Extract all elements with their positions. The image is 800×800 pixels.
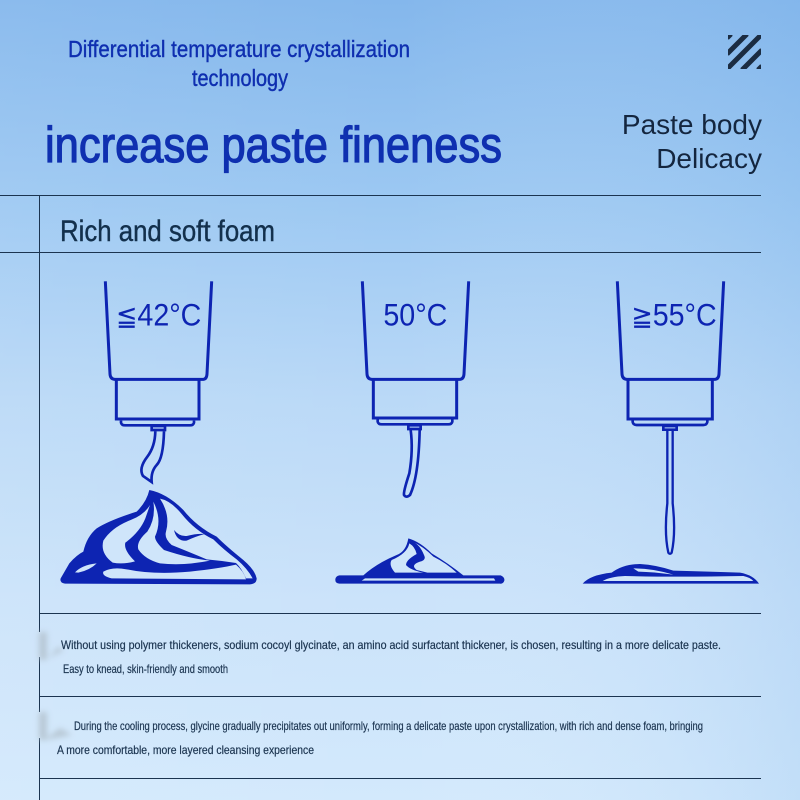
tube outline <box>105 281 212 482</box>
paste mound <box>335 538 504 584</box>
tube outline <box>617 281 724 554</box>
label: paste body delicacy: Delicacy <box>656 143 762 174</box>
paragraph: polymer thickeners <box>61 638 721 676</box>
temperature label: 50°C <box>383 297 447 332</box>
paragraph: cooling process: A more comfortable, more layered cleansing experience <box>57 743 314 757</box>
tube diagram: 55 degrees <box>583 281 759 584</box>
paste mound <box>583 564 759 584</box>
smudge: first paragraph <box>39 632 64 660</box>
temperature label: ≦42°C <box>116 297 201 332</box>
heading: technology subtitle: technology <box>192 65 288 91</box>
title: increase paste fineness <box>45 117 502 173</box>
paragraph: polymer thickeners: Without using polymer thickeners, sodium cocoyl glycinate, an amino acid surfactant thickener, is chosen, resulting in a more delicate paste. <box>61 638 721 652</box>
smudge: second paragraph <box>39 712 72 740</box>
heading: technology subtitle: Differential temperature crystallization <box>68 36 410 62</box>
tube outline <box>362 281 469 497</box>
paragraph: polymer thickeners: Easy to knead, skin-friendly and smooth <box>63 662 228 676</box>
section heading: Rich and soft foam <box>60 215 275 248</box>
icon: hatched square <box>728 35 761 69</box>
tube diagram: 42 degrees <box>60 281 257 584</box>
label: paste body delicacy <box>622 109 762 174</box>
paste mound <box>60 490 257 584</box>
label: paste body delicacy: Paste body <box>622 109 762 140</box>
grid lines <box>0 195 761 800</box>
tube diagram: 50 degrees <box>335 281 504 584</box>
heading: technology subtitle <box>68 36 410 91</box>
temperature label: ≧55°C <box>631 297 717 332</box>
paragraph: cooling process <box>57 719 703 757</box>
